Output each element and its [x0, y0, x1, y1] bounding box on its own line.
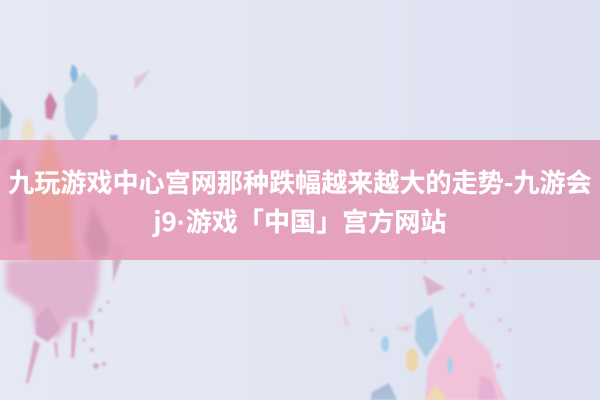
splatter dots lower right: [370, 260, 512, 368]
splatter dots lower left: [82, 300, 110, 369]
title: [8, 163, 592, 239]
title: 九玩游戏中心宫网那种跌幅越来越大的走势-九游会: [8, 163, 592, 200]
pink title band: [0, 140, 600, 260]
upper left gems: [0, 64, 149, 158]
lower right splash: [340, 275, 506, 400]
title: j9·游戏「中国」宫方网站: [153, 202, 447, 239]
lower left splash: [6, 258, 100, 338]
